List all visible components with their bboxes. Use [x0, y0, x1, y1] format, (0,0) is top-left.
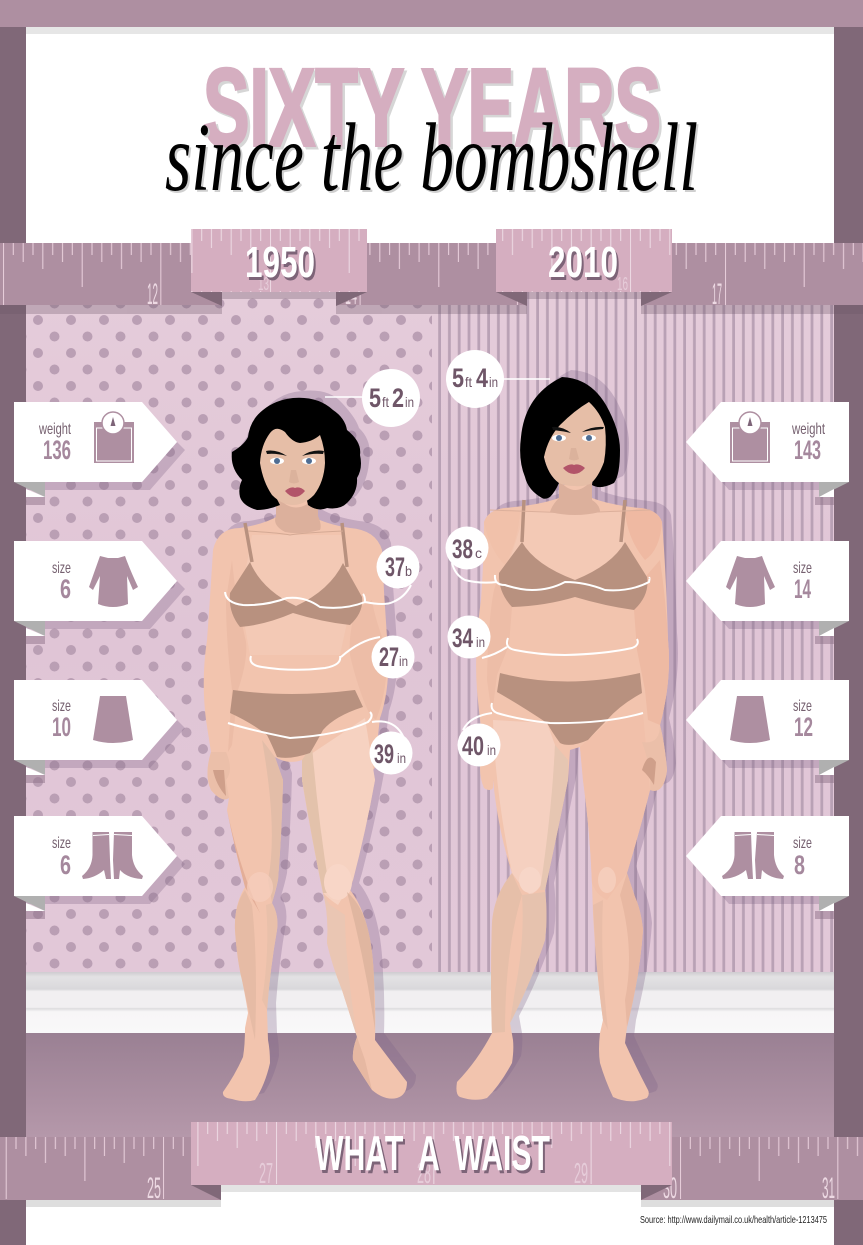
left tag: skirt size 10: size — [52, 698, 71, 715]
thigh inner band right 1950 — [302, 745, 330, 893]
figure 2010 — [452, 370, 678, 1101]
top ruler — [0, 243, 863, 311]
measurement: bust 37b: 37 — [385, 552, 405, 582]
heel shade 1950 — [353, 1037, 372, 1090]
calf right band 2010 — [510, 892, 546, 1023]
torso light 2010 — [505, 512, 630, 590]
right tag: skirt size 12 — [686, 680, 849, 783]
straps 1950 — [245, 523, 347, 567]
floor — [26, 1033, 834, 1137]
measurement: waist 34in — [448, 616, 490, 658]
bra 1950 — [230, 562, 362, 627]
measurement: height 1950: in — [405, 394, 414, 410]
ribbon: what a waist — [191, 1122, 672, 1190]
left tag: top size 6 — [14, 541, 185, 644]
briefs 2010 — [497, 673, 642, 745]
measurement: waist 27in: in — [399, 653, 408, 669]
briefs 1950 — [230, 690, 363, 758]
icon: weighing scale — [730, 412, 770, 463]
measurement: bust 37b: b — [405, 563, 412, 579]
right frame post — [834, 27, 863, 1245]
thigh shade left 1950 — [262, 740, 283, 903]
right tag: skirt size 12: 12 — [794, 712, 813, 742]
face 2010 — [544, 402, 606, 486]
ribbon number 16: 16 — [617, 274, 628, 294]
thigh light left 2010 — [493, 720, 555, 895]
neck shade 2010 — [550, 480, 600, 515]
knee glow 1950 — [247, 872, 273, 902]
top frame bar — [0, 0, 863, 27]
right tag: boots size 8: 8 — [794, 850, 805, 880]
title — [165, 46, 700, 214]
right tag: top size 14 — [686, 541, 849, 644]
calf shade left 1950 — [235, 890, 256, 1040]
figure 1950 — [204, 390, 416, 1101]
left tag: boots size 6: 6 — [60, 850, 71, 880]
measurement: bust 38c: 38 — [452, 534, 473, 564]
left arm shade 1950 — [226, 560, 246, 752]
title panel background — [26, 27, 834, 243]
collar line 2010 — [490, 510, 650, 513]
hair 2010 — [520, 377, 620, 499]
body 1950 — [204, 500, 407, 1101]
left tag: boots size 6 — [14, 816, 185, 919]
measurement: height 1950 — [362, 369, 420, 427]
measurement: bust 38c: c — [475, 545, 482, 561]
ribbon: what a waist: 28 — [417, 1158, 431, 1190]
measurement: hips 40in: in — [487, 742, 496, 758]
right tag: weight 143: weight — [791, 421, 825, 438]
right tag: top size 14: 14 — [794, 574, 811, 604]
thigh crease left 1950 — [227, 810, 260, 913]
hair 1950 — [232, 398, 361, 510]
left tag: weight 136 — [14, 402, 185, 505]
heading: sixty years — [203, 46, 664, 172]
left tag: top size 6: size — [52, 560, 71, 577]
right calf outer band 2010 — [620, 873, 643, 1027]
wallpaper: 2010 stripes — [432, 292, 834, 972]
icon: top — [89, 556, 138, 607]
left tag: weight 136: weight — [38, 421, 71, 438]
hand 1950 — [208, 752, 230, 799]
measurement: bust 38c — [446, 526, 488, 570]
banner text: WHAT A WAIST — [315, 1127, 550, 1181]
calf left band 2010 — [491, 873, 522, 1033]
icon: boots — [82, 832, 143, 879]
ribbon folds bottom — [191, 1185, 672, 1200]
bottom white footer — [26, 1185, 834, 1245]
icon: boots — [722, 832, 784, 879]
ruler shadow strip — [0, 292, 863, 314]
knee glow 2010 — [519, 867, 541, 893]
wall shadow 2010 — [465, 370, 678, 1094]
calf shade right 1950 — [347, 892, 375, 1030]
banner text shadow: WHAT A WAIST — [317, 1130, 552, 1184]
right shoulder cap 2010 — [625, 508, 662, 560]
bottom ruler — [0, 1137, 863, 1205]
icon: skirt — [93, 696, 133, 743]
bra 2010 — [499, 542, 647, 610]
right calf inner band 2010 — [593, 900, 608, 1030]
left tag: skirt size 10: 10 — [52, 712, 71, 742]
left frame post — [0, 27, 26, 1245]
measurement: waist 27in — [372, 636, 414, 678]
year label shadow 1950: 1950 — [247, 241, 317, 290]
ribbon 1950 — [191, 229, 367, 294]
right arm shade 2010 — [634, 560, 669, 725]
measurement: hips 40in — [458, 724, 500, 766]
measurement: hips 40in: 40 — [462, 731, 484, 761]
left tag: weight 136: 136 — [43, 435, 71, 465]
height line 2010 — [504, 378, 550, 380]
hand inner 2010 — [642, 758, 656, 785]
hip tape 1950 — [228, 712, 404, 738]
measurement: height 2010: in — [489, 374, 498, 390]
straps 2010 — [522, 500, 625, 542]
right knee glow 2010 — [598, 867, 616, 893]
right tag: boots size 8 — [686, 816, 849, 919]
icon: weighing scale — [94, 412, 134, 463]
waist tape 2010 — [482, 638, 638, 658]
body 2010 — [456, 485, 669, 1101]
right tag: weight 143: 143 — [794, 435, 821, 465]
shoulder caps 2010 — [484, 508, 520, 565]
top ruler: 14 — [345, 278, 357, 311]
bottom ruler shadow — [26, 1200, 834, 1207]
measurement: waist 34in: in — [476, 634, 485, 650]
year label 1950: 1950 — [245, 238, 315, 287]
measurement: hips 39in — [370, 732, 412, 774]
measurement: waist 27in: 27 — [379, 642, 399, 672]
icon: skirt — [730, 696, 770, 743]
right tag: top size 14: size — [793, 560, 812, 577]
ribbon folds — [191, 292, 672, 306]
thigh right 2010 — [580, 713, 650, 900]
measurement: height 1950: 2 — [392, 383, 404, 413]
ribbon: what a waist: 27 — [259, 1158, 273, 1190]
thigh light right 1950 — [302, 718, 375, 905]
wall shadow 1950 — [213, 390, 416, 1094]
year label 2010: 2010 — [548, 238, 618, 287]
bottom ruler: 25 — [147, 1172, 161, 1205]
measurement: height 2010: 4 — [476, 363, 488, 393]
ribbon number 13: 13 — [258, 274, 269, 294]
neck shade 1950 — [275, 495, 321, 533]
bust tape 1950 — [225, 585, 411, 608]
right tag: skirt size 12: size — [793, 698, 812, 715]
right tag: boots size 8: size — [793, 835, 812, 852]
calf shade inner left 1950 — [262, 903, 277, 1010]
left tag: boots size 6: size — [52, 835, 71, 852]
right tag: weight 143 — [686, 402, 849, 505]
left arm shade 2010 — [487, 575, 512, 715]
calf inner band 1950 — [323, 893, 357, 1037]
bottom ruler: 31 — [822, 1172, 835, 1205]
ribbon 2010 — [496, 229, 672, 294]
hand inner 1950 — [213, 770, 226, 796]
knee glow right 1950 — [324, 864, 352, 900]
left tag: top size 6: 6 — [60, 574, 71, 604]
ribbon: what a waist: 29 — [574, 1158, 588, 1190]
right arm shade 1950 — [350, 600, 387, 720]
measurement: height 1950: ft — [382, 394, 389, 410]
bottom ruler: 30 — [663, 1172, 677, 1205]
waist tape 1950 — [250, 637, 380, 670]
icon: top — [726, 556, 775, 607]
measurement: height 2010: 5 — [452, 363, 464, 393]
measurement: height 2010: ft — [465, 374, 472, 390]
measurement: hips 39in: 39 — [374, 739, 394, 769]
measurement: waist 34in: 34 — [452, 623, 473, 653]
collar line 1950 — [248, 531, 343, 535]
torso light 1950 — [240, 535, 352, 655]
measurement: hips 39in: in — [397, 750, 406, 766]
top ruler: 12 — [147, 278, 158, 311]
year label shadow 2010: 2010 — [550, 241, 620, 290]
face details 2010 — [552, 427, 604, 474]
hip tape 2010 — [463, 703, 643, 730]
wallpaper: 1950 polka dots — [26, 292, 432, 972]
height line 1950 — [325, 396, 365, 398]
measurement: height 2010 — [446, 350, 504, 408]
thigh inner band 2010 — [540, 745, 568, 890]
measurement: bust 37b — [376, 546, 420, 588]
top ruler: 17 — [712, 278, 722, 311]
face 1950 — [260, 429, 325, 505]
hand 2010 — [642, 725, 667, 791]
bust tape 2010 — [452, 563, 650, 590]
skirting board — [26, 972, 834, 1033]
left tag: skirt size 10 — [14, 680, 185, 783]
face details 1950 — [266, 451, 324, 497]
measurement: height 1950: 5 — [369, 383, 381, 413]
